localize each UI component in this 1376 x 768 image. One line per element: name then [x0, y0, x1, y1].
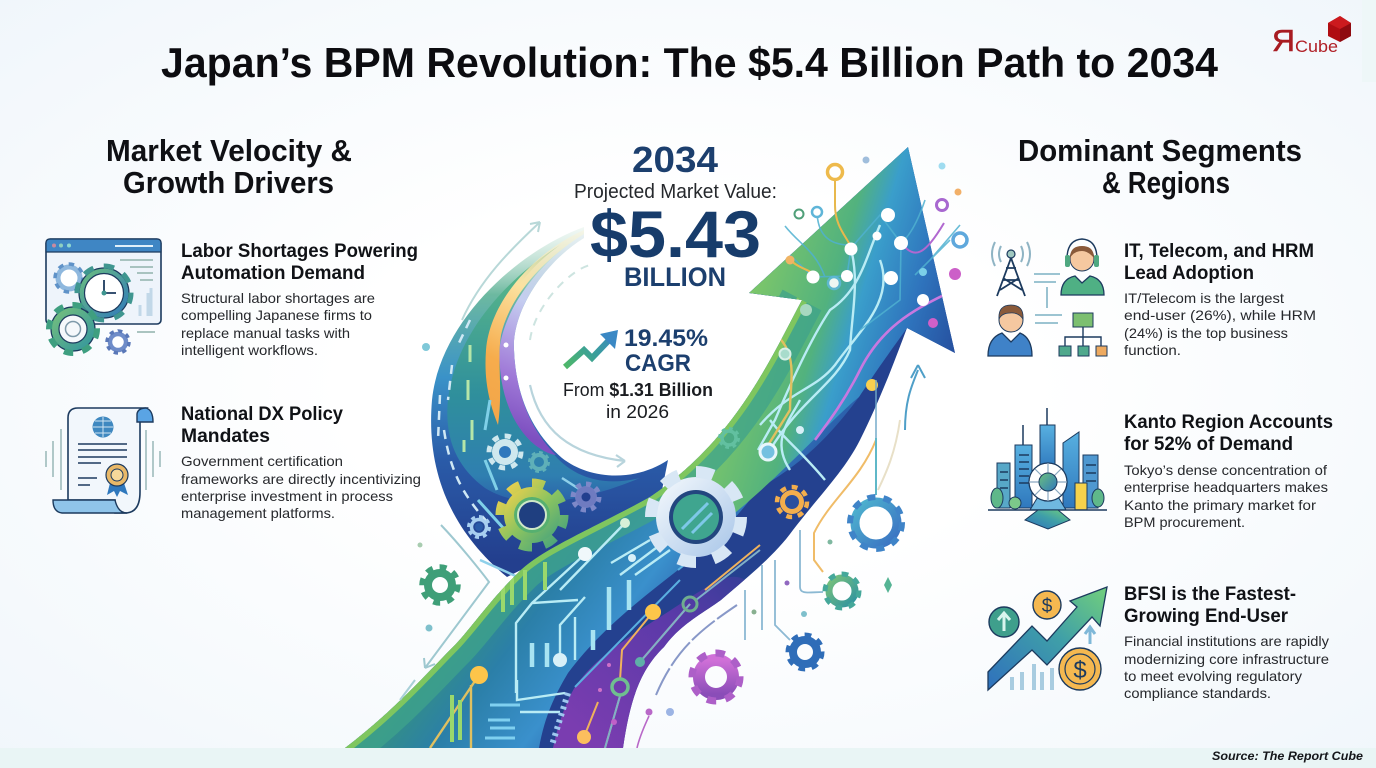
heading: Growth Drivers [123, 165, 334, 200]
heading: Market Velocity & [106, 133, 352, 168]
gear: large white [651, 472, 741, 562]
logo: Я [1272, 23, 1295, 58]
text: labor shortages: replace manual tasks with [181, 325, 350, 341]
text: national DX policy: National DX Policy [181, 404, 343, 425]
text: Kanto region: Kanto Region Accounts [1124, 412, 1333, 433]
icon: Kanto city skyline [988, 408, 1107, 529]
text: Kanto region [1124, 412, 1333, 530]
text: IT telecom and HRM: Lead Adoption [1124, 263, 1254, 284]
heading [106, 133, 352, 200]
gear: purple small [573, 484, 599, 510]
text: IT telecom and HRM: IT, Telecom, and HRM [1124, 241, 1314, 262]
heading: Dominant Segments [1018, 133, 1302, 168]
logo [1272, 16, 1351, 58]
logo: Cube [1295, 37, 1338, 56]
floating gears and lines outside the ribbon [400, 222, 925, 748]
text: Kanto region: Kanto the primary market for [1124, 497, 1316, 513]
CAGR figures: From $1.31 Billion [563, 380, 713, 400]
projected value: $5.43 [590, 197, 761, 271]
projected value [574, 139, 777, 292]
gear: green teal [825, 574, 859, 608]
icon: finance growth arrow [988, 587, 1107, 690]
gear: orange [777, 487, 807, 517]
text: Kanto region: BPM procurement. [1124, 514, 1245, 530]
ribbon: main rising arrow [300, 147, 955, 760]
text: national DX policy: Government certification [181, 453, 343, 469]
CAGR figures [563, 325, 713, 422]
text: BFSI: BFSI is the Fastest- [1124, 584, 1296, 605]
text: national DX policy: enterprise investment in process [181, 488, 393, 504]
gear: purple [692, 653, 740, 701]
text: IT telecom and HRM: IT/Telecom is the largest [1124, 290, 1284, 306]
gear: teal on ribbon [720, 429, 738, 447]
text: BFSI: Growing End-User [1124, 606, 1289, 627]
text: Kanto region: for 52% of Demand [1124, 434, 1293, 455]
text: national DX policy [181, 404, 421, 521]
text: BFSI [1124, 584, 1329, 701]
network nodes at the arrow head [760, 156, 967, 460]
circuit lines [516, 225, 884, 712]
source note: Source: The Report Cube [1212, 749, 1363, 763]
projected value: Projected Market Value: [574, 181, 777, 203]
icon: finance growth arrow: $ [1073, 657, 1087, 684]
icon: workflow window with gears [46, 239, 161, 353]
CAGR figures: CAGR [625, 350, 691, 377]
projected value: 2034 [632, 139, 718, 180]
panel: market velocity and growth drivers [46, 133, 421, 521]
text: labor shortages: compelling Japanese firms to [181, 307, 372, 323]
text: BFSI: to meet evolving regulatory [1124, 668, 1302, 684]
text: labor shortages: Automation Demand [181, 263, 365, 284]
text: IT telecom and HRM: (24%) is the top business [1124, 325, 1288, 341]
icon: CAGR arrow [565, 330, 618, 367]
CAGR figures: 19.45% [624, 325, 708, 352]
text: national DX policy: management platforms. [181, 505, 335, 521]
heading: & Regions [1102, 165, 1230, 200]
icon: telecom and HR people [988, 239, 1107, 356]
panel: center statistics [563, 139, 777, 422]
text: national DX policy: Mandates [181, 426, 270, 447]
title: Japan’s BPM Revolution: The $5.4 Billion Path to 2034 [161, 39, 1219, 86]
top right strip [1362, 0, 1376, 82]
text: BFSI: modernizing core infrastructure [1124, 651, 1329, 667]
CAGR figures: in 2026 [606, 402, 669, 422]
swoosh: curled tail behind the arrow [431, 227, 668, 578]
text: IT telecom and HRM [1124, 241, 1316, 358]
gear: swoosh white [489, 436, 521, 468]
text: labor shortages: Labor Shortages Powering [181, 241, 418, 262]
text: BFSI: compliance standards. [1124, 685, 1271, 701]
gear: green [422, 567, 458, 603]
circuit nodes [470, 518, 697, 744]
projected value: BILLION [624, 262, 726, 292]
gear: blue small [469, 517, 489, 537]
gear: swoosh teal [530, 453, 548, 471]
text: labor shortages: Structural labor shortages are [181, 290, 375, 306]
text: IT telecom and HRM: end-user (26%), while HRM [1124, 307, 1316, 323]
text: labor shortages: intelligent workflows. [181, 342, 318, 358]
icon: finance growth arrow: $ [1042, 596, 1053, 617]
panel: dominant segments and regions [988, 133, 1333, 701]
text: BFSI: Financial institutions are rapidly [1124, 633, 1329, 649]
text: national DX policy: frameworks are directly incentivizing [181, 471, 421, 487]
icon: certificate scroll [46, 408, 160, 513]
text: Kanto region: enterprise headquarters makes [1124, 479, 1328, 495]
text: Kanto region: Tokyo’s dense concentration of [1124, 462, 1327, 478]
footer band [0, 748, 1376, 768]
illustration: growth arrow [300, 147, 967, 760]
gear: yellow green [500, 483, 564, 547]
gears on the ribbon [469, 429, 807, 562]
gear: blue [788, 635, 822, 669]
text: labor shortages [181, 241, 418, 358]
heading [1018, 133, 1302, 200]
text: IT telecom and HRM: function. [1124, 342, 1181, 358]
